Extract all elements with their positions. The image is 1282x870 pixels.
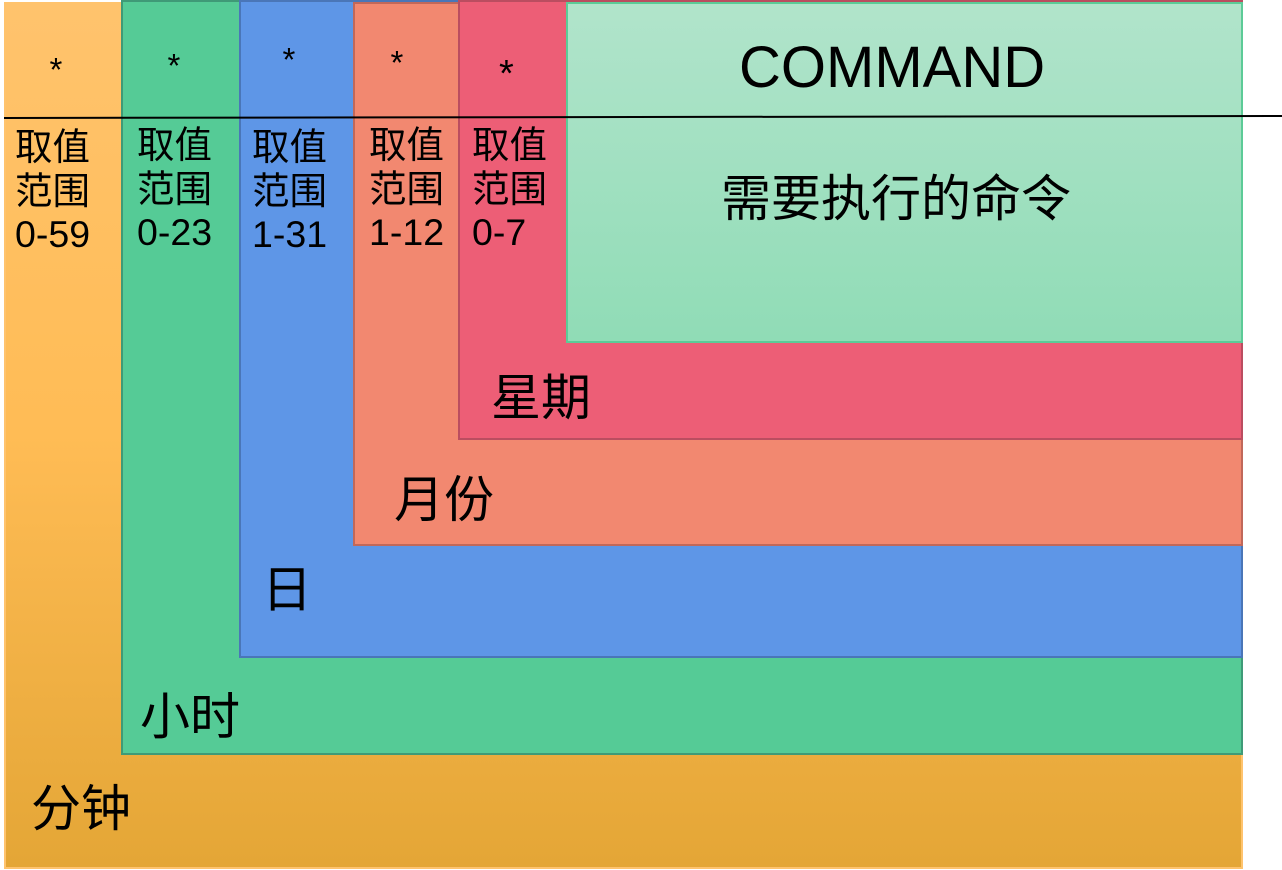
range text: day: 范围 [252, 170, 327, 212]
range text: minute: 0-59 [15, 213, 90, 255]
panel: command layer [566, 2, 1243, 343]
divider line [4, 115, 1282, 119]
range text: weekday: 取值 [472, 124, 547, 166]
range text: weekday: 0-7 [472, 211, 526, 253]
label: day: 日 [262, 562, 312, 618]
label: hour: 小时 [140, 689, 240, 745]
panel: hour layer [121, 0, 1243, 755]
asterisk: day: * [282, 41, 295, 78]
range text: hour: 取值 [137, 124, 212, 166]
range text: minute [15, 126, 90, 255]
asterisk: hour: * [168, 47, 180, 84]
range text: month: 1-12 [369, 211, 444, 253]
range text: hour [137, 124, 212, 253]
asterisk: month: * [390, 44, 403, 81]
range text: hour: 范围 [137, 168, 212, 210]
panel: weekday layer [458, 0, 1243, 440]
label: weekday: 星期 [491, 370, 591, 426]
asterisk: minute: * [50, 51, 62, 88]
range text: day: 取值 [252, 126, 327, 168]
asterisk: weekday: * [499, 53, 514, 95]
command description: 需要执行的命令 [721, 171, 1071, 227]
range text: day: 1-31 [252, 213, 327, 255]
heading: command: COMMAND [739, 35, 1045, 100]
range text: weekday [472, 124, 547, 253]
range text: month [369, 124, 444, 253]
range text: weekday: 范围 [472, 168, 547, 210]
range text: minute: 范围 [15, 170, 90, 212]
range text: hour: 0-23 [137, 211, 212, 253]
range text: month: 取值 [369, 124, 444, 166]
range text: month: 范围 [369, 168, 444, 210]
range text: minute: 取值 [15, 126, 90, 168]
panel: month layer [353, 2, 1243, 546]
range text: day [252, 126, 327, 255]
label: month: 月份 [394, 472, 494, 528]
panel: day layer [239, 0, 1243, 658]
label: minute: 分钟 [31, 781, 131, 837]
